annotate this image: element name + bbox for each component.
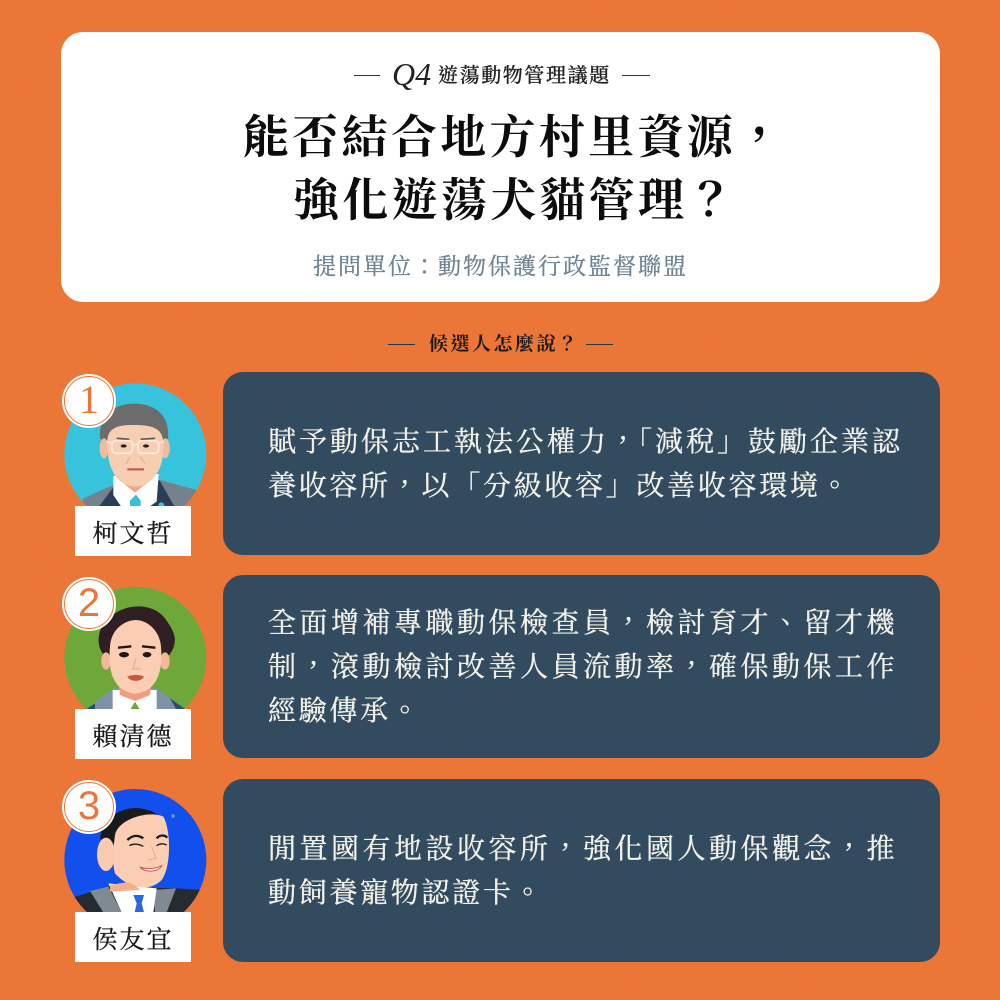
answer 2 text: 制，滾動檢討改善人員流動率，確保動保工作 <box>268 652 898 683</box>
answer 3 text <box>268 834 898 909</box>
answer 2 text: 全面增補專職動保檢查員，檢討育才、留才機 <box>268 608 898 639</box>
panel: answer 2 <box>223 575 940 758</box>
answer 3 text: 閒置國有地設收容所，強化國人動保觀念，推 <box>268 834 898 865</box>
section heading: 候選人怎麼說？ <box>429 334 580 355</box>
portrait group: candidate 1 <box>64 383 206 506</box>
name tag: 賴清德 <box>75 709 191 759</box>
heading line 1: 能否結合地方村里資源， <box>243 112 785 163</box>
answer 3 text: 動飼養寵物認證卡。 <box>268 878 544 909</box>
answer 1 text <box>268 427 903 502</box>
number badge 3 <box>62 780 116 834</box>
answer 1 text: 賦予動保志工執法公權力，「減稅」鼓勵企業認 <box>268 427 903 458</box>
eyebrow: Q4 topic: Q4 <box>392 56 431 92</box>
name tag: 侯友宜: 侯友宜 <box>92 927 174 954</box>
panel: answer 3 <box>223 779 940 962</box>
panel: answer 1 <box>223 372 940 555</box>
answer 1 text: 養收容所，以「分級收容」改善收容環境。 <box>268 471 851 502</box>
number badge 2: 2 <box>78 581 100 625</box>
portrait group: candidate 3 <box>64 789 206 912</box>
eyebrow: Q4 topic: 遊蕩動物管理議題 <box>438 65 611 87</box>
heading line 2: 強化遊蕩犬貓管理？ <box>293 175 737 226</box>
eyebrow: Q4 topic <box>354 56 650 92</box>
number badge 2 <box>62 577 116 631</box>
subtitle: questioner: 提問單位：動物保護行政監督聯盟 <box>313 254 688 279</box>
name tag: 賴清德: 賴清德 <box>92 724 174 751</box>
panel: question header card <box>61 32 940 302</box>
portrait group: candidate 2 <box>64 586 206 709</box>
number badge 1 <box>62 374 116 428</box>
name tag: 柯文哲: 柯文哲 <box>92 521 174 548</box>
name tag: 侯友宜 <box>75 912 191 962</box>
name tag: 柯文哲 <box>75 506 191 556</box>
answer 2 text: 經驗傳承。 <box>268 696 422 727</box>
answer 2 text <box>268 608 898 727</box>
number badge 1: 1 <box>79 377 99 422</box>
number badge 3: 3 <box>78 784 100 828</box>
